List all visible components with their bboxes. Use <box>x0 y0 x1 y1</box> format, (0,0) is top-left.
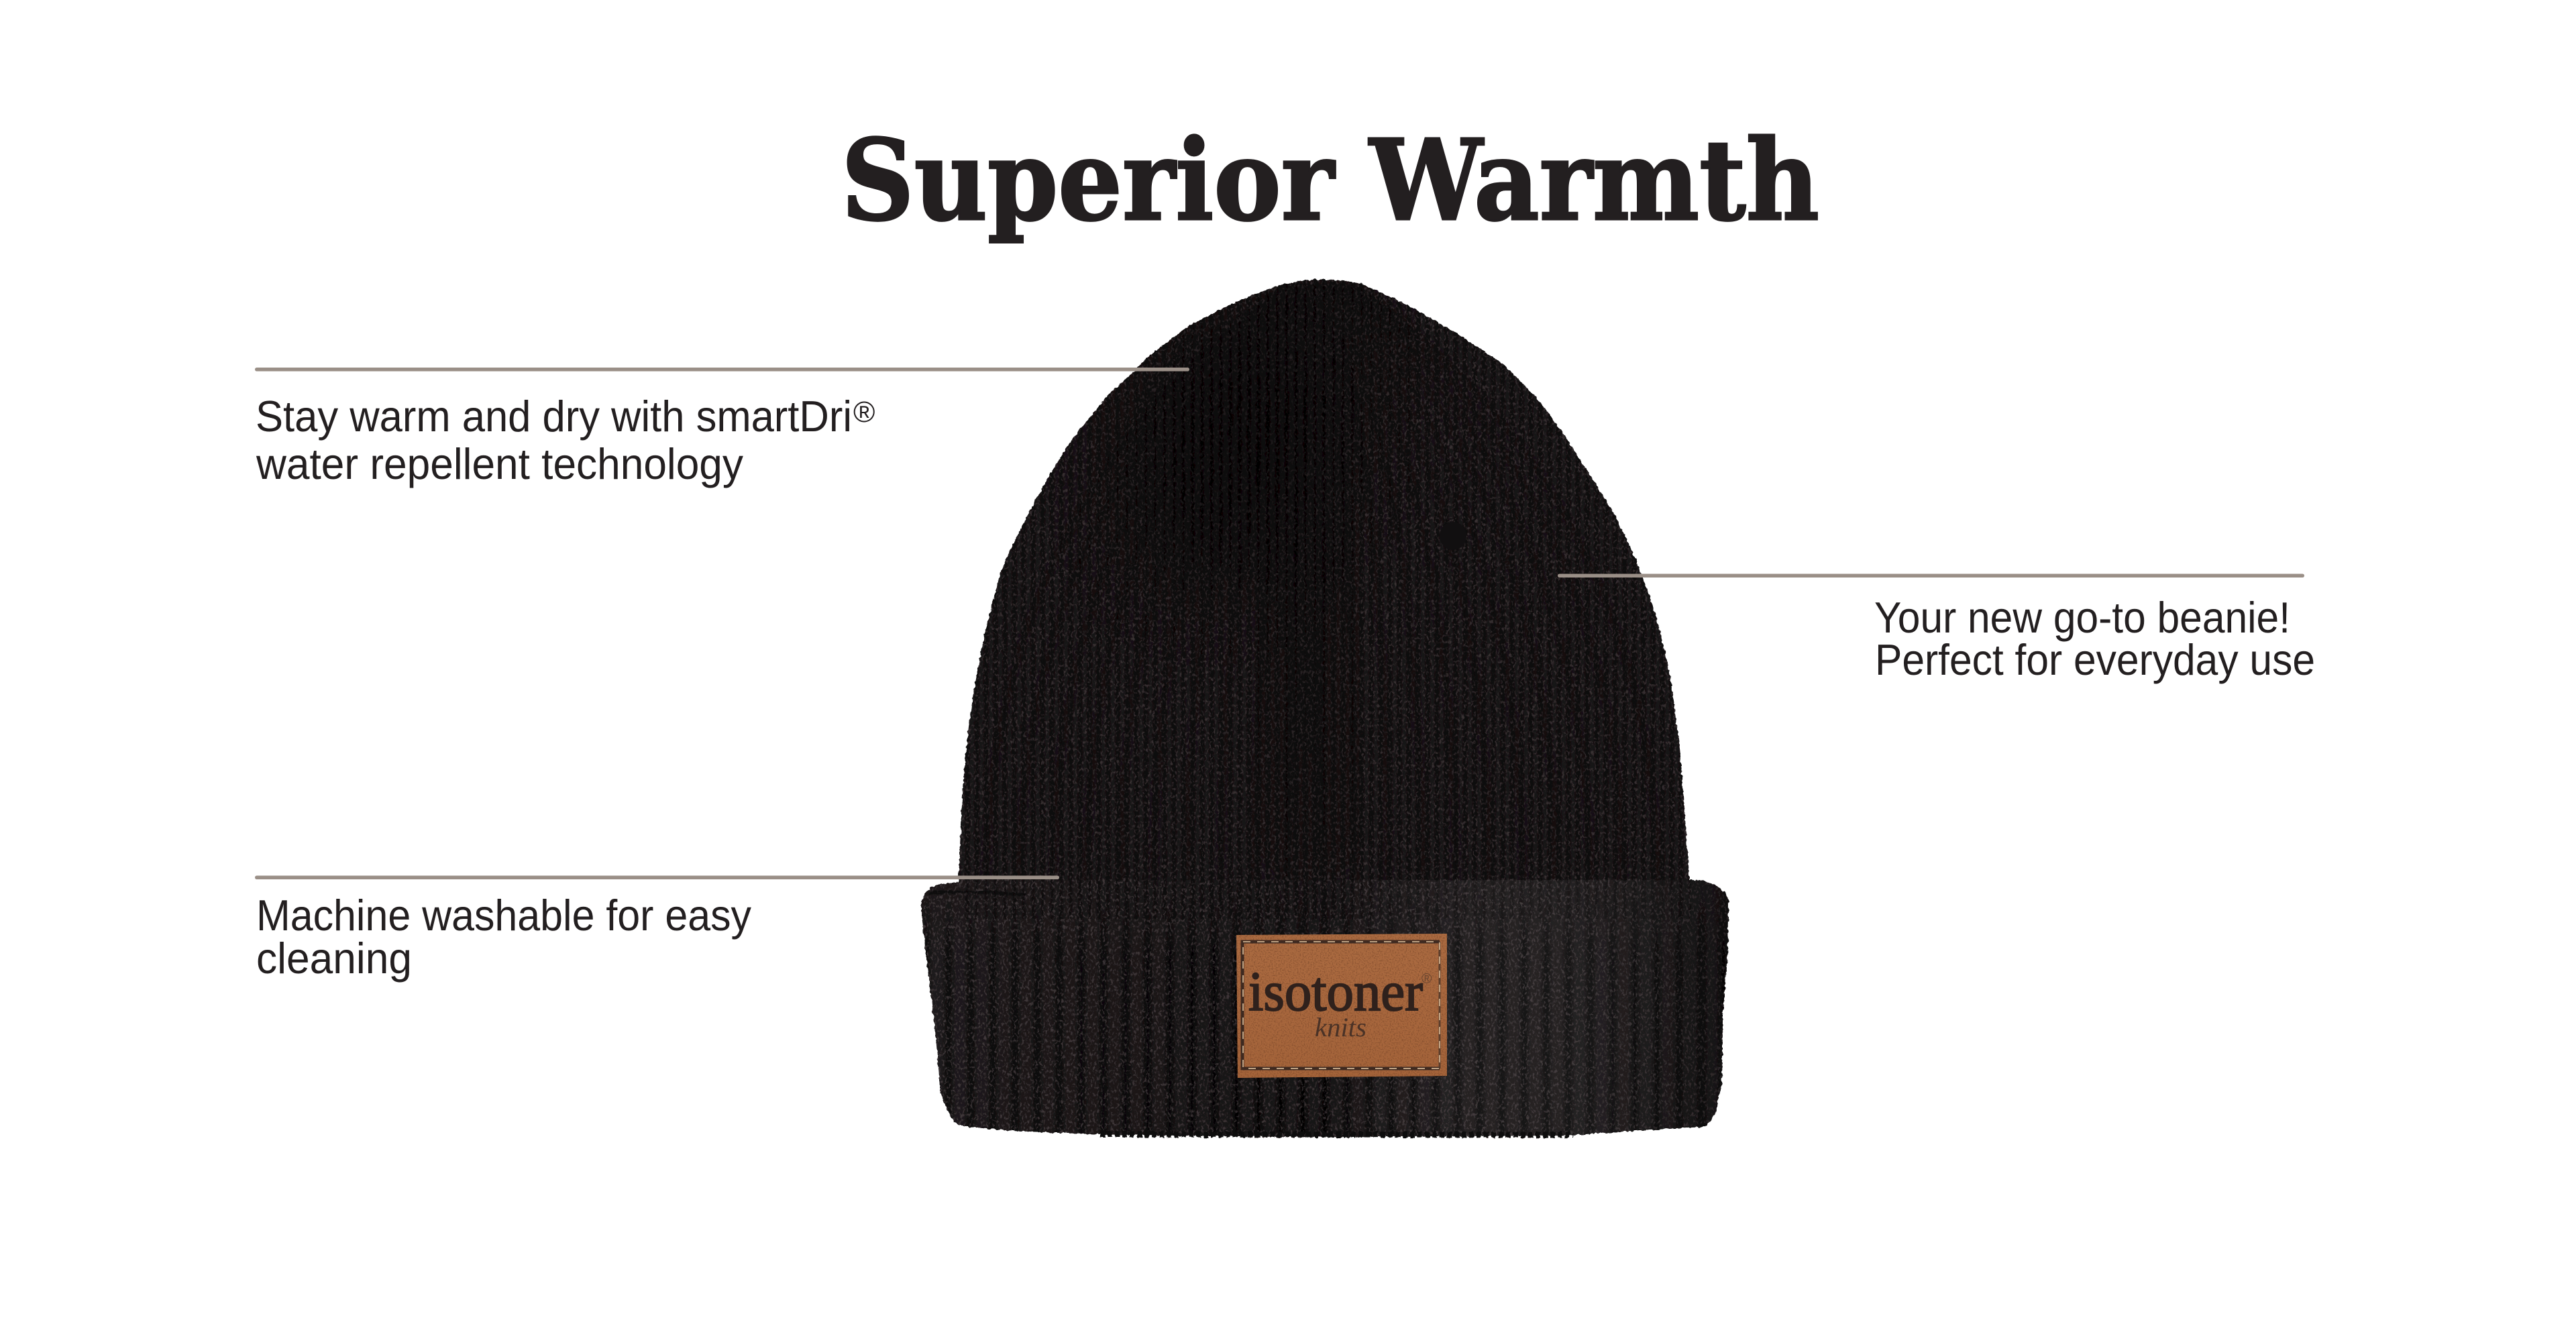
beanie illustration <box>912 268 1737 1140</box>
callout text: water repellent technology <box>256 439 743 488</box>
callout text: cleaning <box>256 934 412 983</box>
callout text: Your new go-to beanie! <box>1874 593 2290 642</box>
cuff fold shadow <box>929 891 1026 895</box>
callout text <box>256 392 875 488</box>
leader line <box>255 368 1189 372</box>
leader line <box>255 876 1059 879</box>
callout: everyday beanie <box>1558 574 2315 684</box>
callout text: Stay warm and dry with smartDri <box>256 392 852 441</box>
leather patch <box>1236 934 1447 1078</box>
cuff <box>912 872 1737 1140</box>
patch base <box>1236 934 1447 1078</box>
callout text <box>1874 593 2315 684</box>
black dot on crown <box>1440 522 1466 550</box>
crown <box>939 268 1711 899</box>
patch registered mark: ® <box>1421 971 1432 987</box>
callout: machine washable <box>255 876 1059 983</box>
callout text: Machine washable for easy <box>256 891 751 940</box>
patch knits script: knits <box>1315 1012 1366 1042</box>
callout text: ® <box>853 396 875 429</box>
callout: smartDri water repellent <box>255 368 1189 488</box>
patch suede texture <box>1236 934 1447 1077</box>
patch stitching <box>1242 942 1440 1068</box>
leader line <box>1558 574 2304 578</box>
callout text <box>256 891 751 983</box>
beanie knit body <box>912 268 1737 1140</box>
title: Superior Warmth <box>841 115 1819 246</box>
patch logo wordmark: isotoner <box>1248 960 1423 1023</box>
callout text: Perfect for everyday use <box>1875 635 2315 684</box>
cuff ribbed bottom edge <box>1100 1134 1573 1135</box>
